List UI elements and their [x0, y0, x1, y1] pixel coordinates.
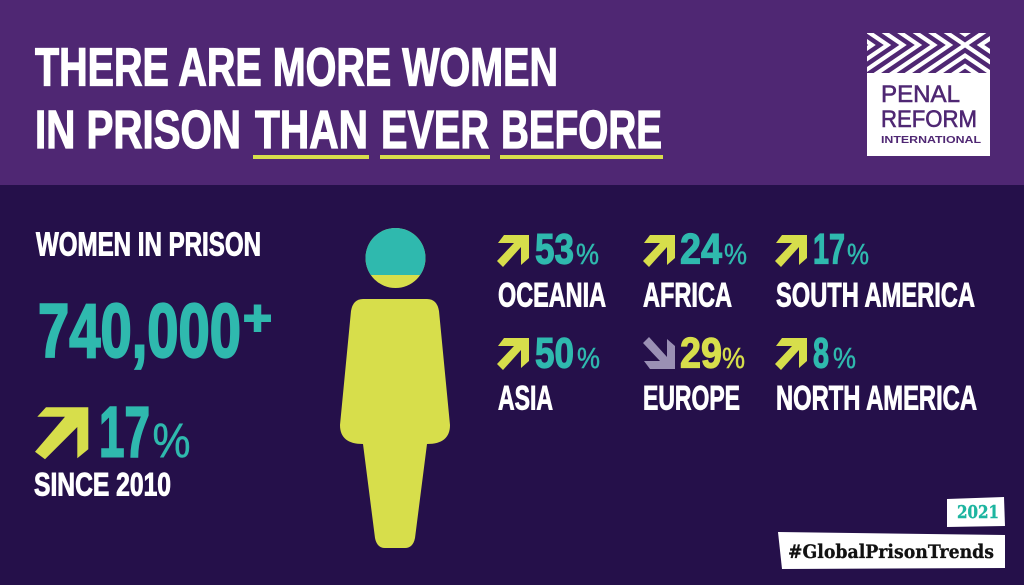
stat: Asia	[497, 330, 600, 418]
stat: Oceania: 53	[535, 226, 574, 274]
header band	[0, 0, 1024, 185]
total figure: 740,000+: +	[243, 290, 272, 346]
caption: SINCE 2010	[34, 466, 171, 502]
stat: North America: 8	[813, 330, 829, 378]
stat: Europe: 29	[680, 330, 722, 378]
stat: Europe: EUROPE	[643, 380, 740, 418]
stat: Asia: ASIA	[498, 380, 553, 418]
badge: hashtag	[778, 532, 1005, 569]
stat: South America: 17	[813, 226, 845, 274]
title: EVER	[381, 100, 489, 160]
stat: South America	[775, 226, 975, 314]
stat: Africa: 24	[680, 226, 722, 274]
logo: Penal Reform International: INTERNATIONAL	[881, 135, 981, 146]
icon: woman figure	[340, 228, 450, 548]
heading: women in prison: WOMEN IN PRISON	[36, 226, 261, 262]
stat: North America	[775, 330, 977, 418]
stat: Asia: %	[577, 343, 600, 375]
stat: Oceania	[497, 226, 606, 314]
title: THERE ARE MORE WOMEN	[35, 38, 558, 98]
title: IN PRISON	[35, 100, 241, 160]
logo: Penal Reform International: PENAL	[881, 81, 960, 108]
stat: Europe: %	[722, 343, 745, 375]
title: THAN	[255, 100, 368, 160]
total figure: 740,000+: 740,000	[38, 289, 241, 374]
stat: Oceania: %	[576, 239, 599, 271]
stat: 17% since 2010	[34, 394, 190, 502]
title	[35, 38, 663, 160]
stat: Africa: %	[724, 239, 747, 271]
stat: Africa: AFRICA	[643, 276, 732, 314]
stat: Europe	[643, 330, 745, 418]
stat: Africa	[643, 226, 747, 314]
logo: Penal Reform International	[867, 33, 990, 156]
stat: North America: %	[833, 343, 856, 375]
stat: Asia: 50	[535, 330, 574, 378]
number: %	[152, 415, 190, 468]
body background	[0, 185, 1024, 585]
badge: hashtag: #GlobalPrisonTrends	[788, 541, 994, 563]
logo: Penal Reform International: REFORM	[881, 106, 977, 133]
badge: 2021	[947, 497, 1005, 527]
badge: 2021: 2021	[957, 502, 999, 523]
number: 17	[99, 394, 150, 472]
title: BEFORE	[501, 100, 662, 160]
stat: South America: %	[847, 239, 869, 271]
icon: up arrow	[35, 407, 88, 459]
stat: Oceania: OCEANIA	[498, 276, 606, 314]
